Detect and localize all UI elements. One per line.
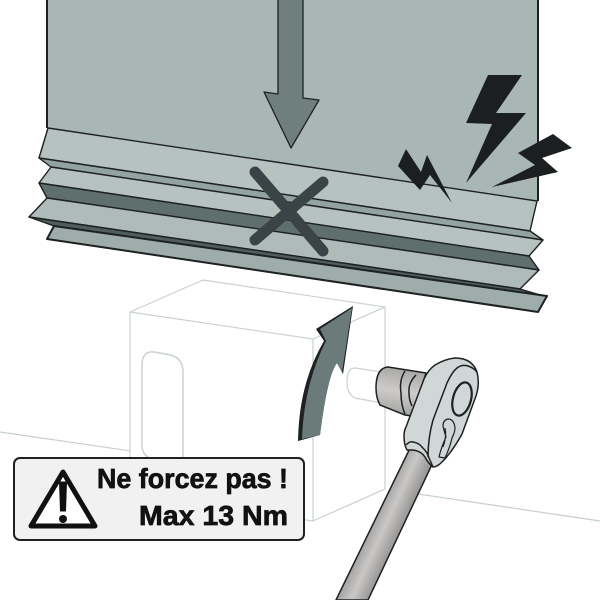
torque text: Max 13 Nm xyxy=(139,500,288,531)
wrench keyhole xyxy=(439,419,455,458)
arrow: downward force xyxy=(264,0,319,148)
label text: Ne forcez pas ! xyxy=(97,463,288,494)
ratchet wrench xyxy=(336,358,478,600)
drive shaft xyxy=(347,368,382,403)
fold 3 xyxy=(29,198,539,289)
roller blind xyxy=(29,0,547,312)
wrench handle xyxy=(336,438,436,600)
arrow: tightening direction xyxy=(298,306,353,441)
bottom rail xyxy=(47,226,547,312)
background floor lines xyxy=(0,432,600,521)
icon: warning triangle xyxy=(31,472,95,526)
blind main panel xyxy=(47,0,538,201)
bracket box xyxy=(130,280,385,521)
warning label xyxy=(14,458,304,540)
icon: lightning bolts xyxy=(398,75,572,203)
fold 1 xyxy=(39,128,537,231)
fold 2 xyxy=(39,167,543,256)
wrench button xyxy=(449,380,475,418)
label panel xyxy=(14,458,304,540)
wrench socket xyxy=(376,367,426,416)
wrench head xyxy=(404,358,478,467)
icon: prohibited cross xyxy=(255,172,323,251)
